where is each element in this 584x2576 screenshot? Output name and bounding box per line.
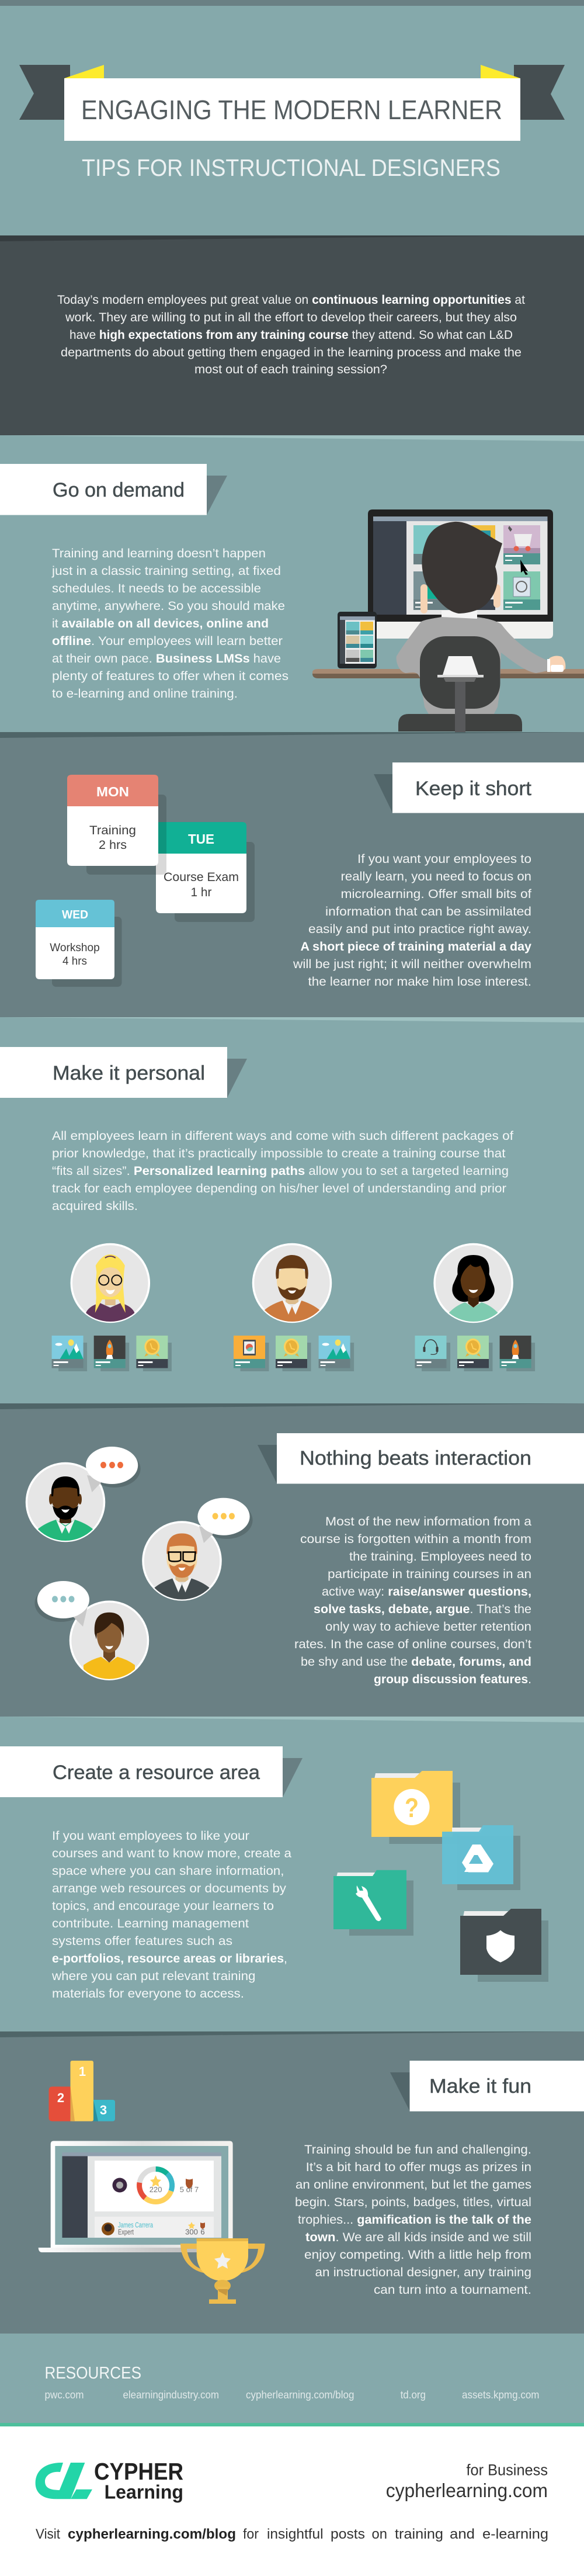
icon: blue folder with drive symbol (442, 1825, 520, 1890)
text: create a resource area: space where you can share information, (52, 1864, 284, 1878)
avatar: woman in yellow with speech bubble (34, 1581, 148, 1681)
text: create a resource area: systems offer features such as (52, 1934, 232, 1948)
footer call to action (36, 2526, 548, 2542)
text: keep it short: If you want your employees to (357, 852, 531, 866)
badge icon (186, 2179, 193, 2189)
intro text: Today’s modern employees put great value on continuous learning opportunities at (57, 293, 525, 307)
text: nothing beats interaction: be shy and use the debate, forums, and (301, 1655, 531, 1669)
person (397, 522, 565, 720)
resources links: elearningindustry.com (123, 2389, 219, 2401)
footer call to action: Visit (36, 2526, 60, 2542)
card: wednesday: Workshop (50, 942, 100, 954)
text: make it personal: acquired skills. (52, 1199, 138, 1213)
resources links (44, 2389, 540, 2401)
text: nothing beats interaction (294, 1515, 531, 1686)
avatar: red-haired man with speech bubble (143, 1498, 253, 1602)
footer call to action: for (243, 2526, 259, 2542)
icon: podium: 2 (57, 2090, 64, 2105)
title ribbon (19, 65, 565, 141)
leaderboard row (102, 2220, 205, 2237)
website url: cypherlearning.com (386, 2480, 548, 2501)
text: nothing beats interaction: course is forgotten within a month from (300, 1533, 531, 1546)
tablet (338, 612, 377, 668)
icon: yellow folder with question mark: ? (405, 1793, 419, 1823)
resources links: cypherlearning.com/blog (246, 2389, 354, 2401)
text: go on demand: schedules. It needs to be accessible (52, 582, 261, 595)
text: create a resource area: If you want employees to like your (52, 1829, 249, 1843)
leaderboard row: 300 (185, 2227, 198, 2237)
text: go on demand: offline. Your employees will learn better (52, 635, 283, 648)
text: keep it short: microlearning. Offer small bits of (341, 887, 531, 901)
icon: podium: 3 (100, 2103, 107, 2117)
text: make it fun: trophies... gamification is the talk of the (298, 2213, 531, 2227)
resources links: pwc.com (44, 2389, 84, 2401)
title: ENGAGING THE MODERN LEARNER (81, 95, 502, 125)
text: nothing beats interaction: only way to achieve better retention (325, 1620, 531, 1634)
text: nothing beats interaction: participate in training courses in an (328, 1568, 531, 1581)
subtitle: TIPS FOR INSTRUCTIONAL DESIGNERS (82, 154, 500, 181)
card: tuesday: Course Exam (164, 871, 239, 884)
text: go on demand: it available on all devices, online and (52, 617, 269, 630)
text: keep it short: will be just right; it will neither overwhelm (293, 958, 531, 971)
text: make it fun: can turn into a tournament. (374, 2283, 531, 2297)
text: go on demand (51, 547, 288, 701)
intro text: work. They are willing to put in all the effort to develop their careers, but they also (65, 311, 517, 324)
text: go on demand: Training and learning doesn’t happen (52, 547, 266, 560)
icon: podium (49, 2061, 115, 2121)
star icon (150, 2175, 161, 2187)
intro text: most out of each training session? (194, 363, 387, 376)
footer call to action: training (395, 2526, 443, 2542)
illustration: person at desk with monitor and tablet (312, 509, 584, 732)
footer call to action: cypherlearning.com/blog (68, 2526, 236, 2542)
text: go on demand: plenty of features to offer when it comes (52, 670, 288, 683)
panel: create a resource area heading (0, 1746, 303, 1797)
text: create a resource area: topics, and encourage your learners to (52, 1899, 274, 1913)
illustration: laptop with gamification dashboard (39, 2141, 233, 2252)
card: monday (67, 775, 166, 875)
card: monday: 2 hrs (99, 838, 127, 852)
badge label: 5 of 7 (180, 2185, 199, 2194)
intro text (57, 293, 525, 376)
text: create a resource area: arrange web resources or documents by (52, 1882, 287, 1895)
text: keep it short: really learn, you need to focus on (341, 870, 531, 883)
text: make it personal: “fits all sizes”. Personalized learning paths allow you to set a targeted learning (52, 1164, 509, 1178)
text: keep it short (293, 852, 531, 989)
intro text: departments do about getting them engaged in the learning process and make the (61, 346, 522, 359)
course cards: third learner (415, 1336, 535, 1371)
text: create a resource area: where you can put relevant training (51, 1970, 256, 1983)
panel: go on demand heading: Go on demand (53, 479, 185, 501)
resources links: td.org (401, 2389, 426, 2401)
avatar (112, 2178, 127, 2192)
text: nothing beats interaction: solve tasks, debate, argue . That’s the (314, 1603, 531, 1616)
panel: make it personal heading: Make it personal (53, 1062, 205, 1084)
text: keep it short: the learner nor make him lose interest. (308, 975, 531, 989)
card: wednesday: WED (62, 909, 88, 921)
leaderboard row: Expert (118, 2227, 134, 2237)
text: create a resource area (51, 1829, 291, 2001)
schedule cards (36, 775, 255, 987)
avatar: woman with curly hair (434, 1244, 512, 1324)
text: make it fun: Training should be fun and challenging. (304, 2143, 531, 2157)
text: go on demand: to e-learning and online training. (52, 687, 238, 701)
points label: 220 (150, 2185, 162, 2194)
for business tagline: for Business (466, 2461, 548, 2479)
leaderboard row: 6 (200, 2227, 205, 2237)
panel: make it personal heading (0, 1047, 247, 1098)
text: make it personal: prior knowledge, that it’s practically impossible to create a training course that (52, 1147, 506, 1160)
card: monday: MON (96, 784, 129, 799)
text: keep it short: A short piece of training material a day (300, 940, 531, 954)
text: go on demand: just in a classic training setting, at fixed (51, 564, 281, 578)
footer call to action: posts (331, 2526, 365, 2542)
logo mark (36, 2463, 92, 2499)
leaderboard row: James Carrera (118, 2220, 154, 2230)
panel: create a resource area heading: Create a resource area (53, 1762, 260, 1784)
text: make it fun: It’s a bit hard to offer mugs as prizes in (306, 2161, 531, 2174)
footer call to action: insightful (267, 2526, 324, 2542)
text: go on demand: anytime, anywhere. So you should make (52, 599, 285, 613)
avatar: bearded man (253, 1244, 331, 1324)
text: make it fun: an instructional designer, any training (315, 2266, 531, 2279)
footer call to action: and (450, 2526, 475, 2542)
text: keep it short: information that can be assimilated (325, 905, 531, 918)
icon: trophy (180, 2238, 265, 2304)
text: make it personal: track for each employee depending on his/her level of understanding and prior (52, 1182, 506, 1195)
panel: make it fun heading (390, 2061, 584, 2112)
text: make it personal (52, 1129, 513, 1213)
course cards: first learner (52, 1336, 172, 1371)
donut chart (140, 2169, 172, 2202)
text: go on demand: at their own pace. Business LMSs have (52, 652, 281, 665)
panel: nothing beats interaction heading: Nothing beats interaction (300, 1447, 531, 1469)
panel: nothing beats interaction heading (258, 1433, 584, 1484)
logo wordmark: CYPHER (94, 2458, 183, 2485)
text: nothing beats interaction: rates. In the case of online courses, don’t (294, 1638, 531, 1651)
text: nothing beats interaction: group discussion features. (374, 1673, 531, 1686)
text: make it fun: enjoy competing. With a little help from (304, 2248, 531, 2262)
text: create a resource area: courses and want to know more, create a (52, 1847, 291, 1860)
text: make it personal: All employees learn in different ways and come with such different packages of (52, 1129, 513, 1143)
text: keep it short: easily and put into practice right away. (308, 923, 531, 936)
monitor (368, 509, 553, 639)
card: tuesday (156, 822, 255, 922)
text: make it fun (295, 2143, 531, 2297)
resources heading: RESOURCES (44, 2364, 141, 2383)
panel: keep it short heading (374, 762, 584, 813)
desk (312, 669, 584, 678)
card: wednesday (36, 900, 121, 987)
card: wednesday: 4 hrs (62, 955, 87, 968)
icon: green folder with wrench (333, 1870, 413, 1936)
logo wordmark (94, 2458, 183, 2503)
text: nothing beats interaction: the training. Employees need to (349, 1550, 531, 1563)
intro text: have high expectations from any training course they attend. So what can L&D (69, 328, 513, 342)
footer call to action: e-learning (482, 2526, 548, 2542)
logo: cypher learning (36, 2458, 183, 2503)
text: nothing beats interaction: active way: raise/answer questions, (322, 1585, 531, 1599)
text: create a resource area: e-portfolios, resource areas or libraries , (52, 1952, 287, 1965)
office chair (398, 636, 522, 732)
text: make it fun: begin. Stars, points, badges, titles, virtual (295, 2196, 531, 2209)
text: nothing beats interaction: Most of the new information from a (325, 1515, 531, 1528)
panel: go on demand heading (0, 464, 227, 515)
panel: make it fun heading: Make it fun (429, 2075, 531, 2097)
avatar: man in green with speech bubble (27, 1447, 141, 1543)
card: monday: Training (89, 824, 136, 837)
card: tuesday: 1 hr (190, 886, 212, 899)
text: create a resource area: contribute. Learning management (52, 1917, 249, 1930)
footer call to action: on (371, 2526, 387, 2542)
logo wordmark: Learning (105, 2481, 183, 2503)
course cards: second learner (234, 1336, 354, 1371)
icon: dark folder with shield (460, 1909, 548, 1982)
panel: keep it short heading: Keep it short (415, 778, 532, 800)
text: create a resource area: materials for everyone to access. (52, 1987, 244, 2001)
avatar: blonde woman (71, 1244, 149, 1324)
card: tuesday: TUE (188, 831, 214, 847)
icon: yellow folder with question mark (371, 1771, 460, 1844)
text: make it fun: an online environment, but let the games (296, 2178, 531, 2192)
text: make it fun: town. We are all kids inside and we still (305, 2231, 531, 2244)
icon: podium: 1 (79, 2064, 86, 2079)
resources links: assets.kpmg.com (462, 2389, 540, 2401)
cursor (520, 560, 528, 575)
